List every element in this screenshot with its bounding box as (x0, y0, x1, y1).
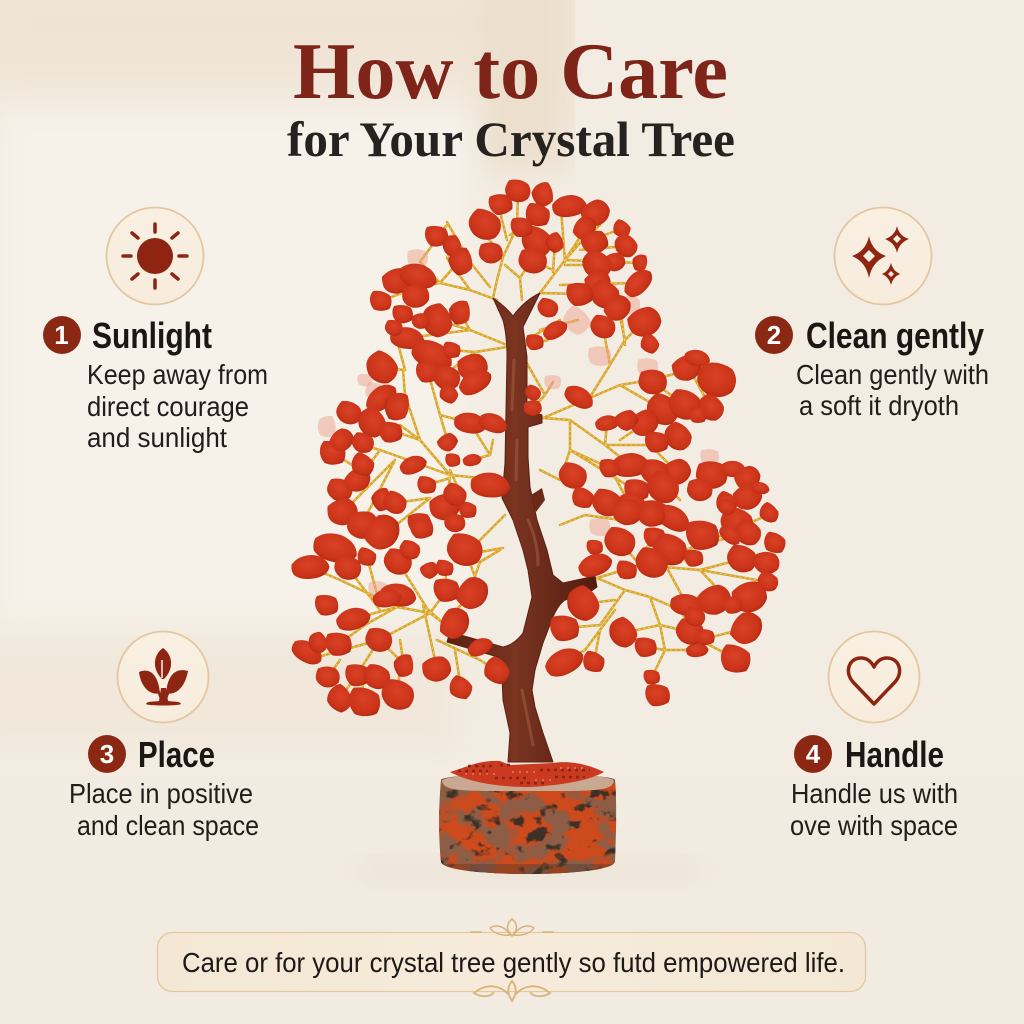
text: sunlight description (87, 359, 268, 453)
stones: right cluster (522, 348, 788, 595)
text: clean gently description: a soft it dryoth (799, 390, 959, 421)
number badge 4 (794, 735, 832, 773)
heading: handle: Handle (845, 734, 944, 775)
text: place description: Place in positive (69, 778, 253, 809)
title line 2: for Your Crystal Tree (287, 111, 735, 167)
number badge 1: 1 (54, 320, 69, 350)
text: handle description: Handle us with (791, 778, 958, 809)
trunk (447, 293, 597, 762)
trunk highlights (512, 360, 538, 745)
heading: place: Place (138, 734, 215, 775)
title line 1: How to Care (293, 28, 728, 116)
base (438, 761, 618, 880)
stones: lower right (541, 578, 770, 706)
number badge 4: 4 (806, 739, 821, 769)
icon: sparkles (834, 208, 932, 304)
text: sunlight description: and sunlight (87, 422, 227, 453)
trunk stub (531, 488, 545, 512)
text: handle description (790, 778, 958, 841)
ornament: top (470, 919, 554, 936)
panel: handle (790, 632, 958, 841)
heading: clean gently: Clean gently (806, 315, 984, 356)
base rim (442, 774, 614, 791)
text: sunlight description: Keep away from (87, 359, 268, 390)
stones: upper crown (425, 176, 665, 357)
number badge 3: 3 (100, 739, 114, 769)
gold wires (307, 193, 770, 702)
number badge 2: 2 (767, 320, 781, 350)
wire highlights (307, 193, 770, 702)
text: handle description: ove with space (790, 810, 958, 841)
panel: place (69, 632, 259, 841)
text: place description (69, 778, 259, 841)
text: clean gently description (796, 359, 989, 421)
number badge 3 (88, 735, 126, 773)
icon: heart (828, 632, 920, 722)
banner box (158, 932, 866, 992)
icon: sun (106, 208, 204, 304)
panel: sunlight (43, 208, 268, 453)
banner text: Care or for your crystal tree gently so futd empowered life. (182, 947, 845, 978)
icon: plant (118, 632, 208, 722)
crystal chips (450, 761, 604, 787)
stones: upper left (318, 260, 511, 536)
text: place description: and clean space (77, 810, 259, 841)
number badge 1 (43, 316, 81, 354)
callout banner (158, 919, 866, 1001)
title (287, 28, 735, 167)
heading: sunlight: Sunlight (92, 315, 212, 356)
number badge 2 (755, 316, 793, 354)
ornament: bottom (474, 981, 550, 1001)
panel: clean gently (755, 208, 989, 421)
text: clean gently description: Clean gently with (796, 359, 989, 390)
stones: lower left (288, 508, 514, 719)
crystal tree (288, 176, 788, 880)
text: sunlight description: direct courage (87, 391, 249, 422)
base body (439, 776, 616, 874)
stones: pale quartz (316, 249, 719, 597)
